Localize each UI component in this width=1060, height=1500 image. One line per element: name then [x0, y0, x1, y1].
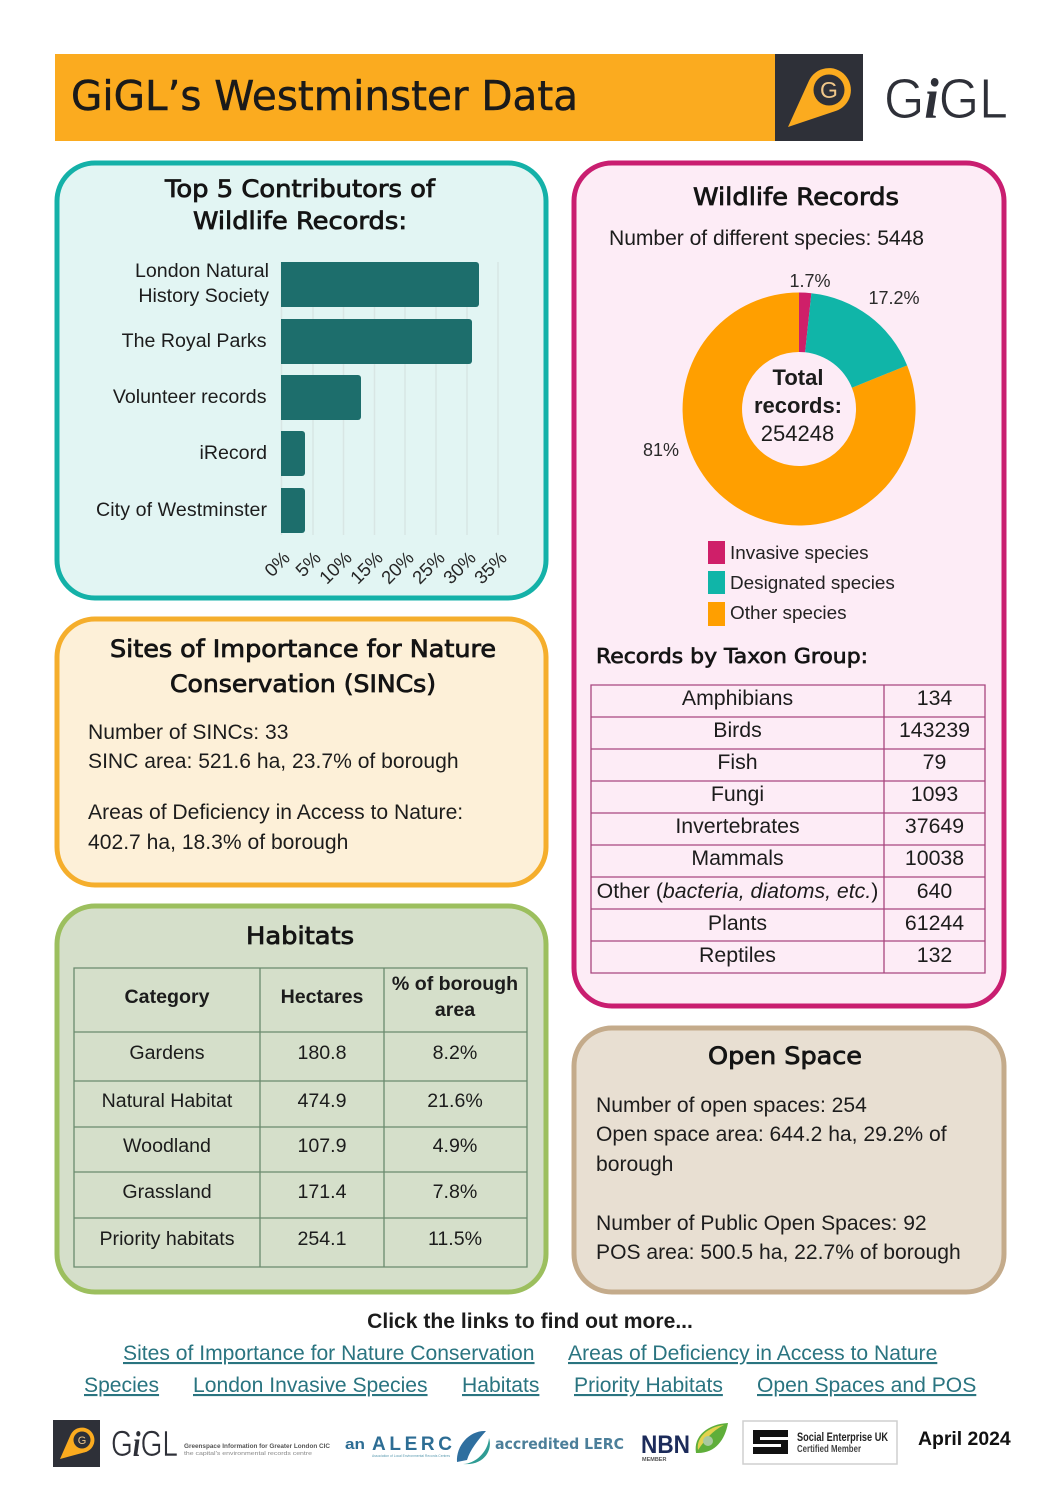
- table: taxon groups: 134: [917, 686, 952, 710]
- title: GiGL’s Westminster Data: [71, 72, 578, 120]
- donut chart: species share: Total: [773, 365, 823, 390]
- bar chart: contributors: 20%: [377, 547, 418, 588]
- table: taxon groups: 37649: [905, 814, 964, 838]
- table: taxon groups: Plants: [708, 911, 767, 935]
- table: taxon groups: Fish: [717, 750, 758, 774]
- text: public open spaces figures: Number of Public Open Spaces: 92: [596, 1212, 927, 1235]
- icon: GiGL map pin logo: G: [820, 77, 838, 103]
- links row two: Open Spaces and POS: [757, 1374, 976, 1397]
- bar chart: contributors: 0%: [260, 547, 294, 581]
- footer logo: ALERC accredited LERC: [345, 1431, 624, 1464]
- footer logo: Social Enterprise UK: [743, 1421, 897, 1464]
- bar chart: contributors: The Royal Parks: [122, 330, 267, 352]
- legend: [708, 541, 895, 626]
- table: habitats: % of borough: [392, 973, 518, 995]
- donut chart: species share: 81%: [643, 440, 679, 460]
- donut chart: species share: records:: [754, 393, 842, 418]
- footer logo: Social Enterprise UK: Social Enterprise UK: [797, 1430, 888, 1444]
- links row two: Habitats: [462, 1374, 539, 1397]
- text: open spaces figures: [596, 1094, 947, 1176]
- table: taxon groups: Fungi: [711, 782, 764, 806]
- text: SINC figures: SINC area: 521.6 ha, 23.7% of borough: [88, 750, 459, 773]
- links row one: Sites of Importance for Nature Conservation: [123, 1342, 535, 1365]
- text: open spaces figures: borough: [596, 1153, 673, 1176]
- table: habitats: 7.8%: [433, 1181, 477, 1203]
- text: areas of deficiency: [88, 801, 463, 854]
- table: habitats: [74, 968, 527, 1267]
- bar chart: contributors: 10%: [315, 547, 356, 588]
- header banner: [55, 54, 775, 141]
- icon: GiGL map pin logo: [775, 54, 863, 141]
- bar chart: contributors: History Society: [138, 285, 269, 307]
- text: SINC figures: Number of SINCs: 33: [88, 721, 288, 744]
- table: taxon groups: Mammals: [691, 846, 784, 870]
- links row two: Species: [84, 1374, 159, 1397]
- table: habitats: 21.6%: [427, 1090, 483, 1112]
- panel: top 5 contributors: [57, 163, 546, 598]
- bar chart: contributors: London Natural: [135, 260, 269, 282]
- bar chart: contributors: 30%: [439, 547, 480, 588]
- footer logo: ALERC accredited LERC: Association of Local Environmental Records Centres: [372, 1453, 450, 1458]
- table: habitats: 11.5%: [428, 1228, 482, 1250]
- footer logo: GiGL: the capital's environmental records centre: [184, 1451, 312, 1457]
- links row one: Areas of Deficiency in Access to Nature: [568, 1342, 937, 1365]
- footer logo: NBN member: MEMBER: [642, 1457, 666, 1463]
- table: habitats: 107.9: [297, 1135, 347, 1157]
- panel: open space: [574, 1028, 1004, 1292]
- text: areas of deficiency: 402.7 ha, 18.3% of borough: [88, 831, 348, 854]
- footer logo: Social Enterprise UK: Certified Member: [797, 1443, 861, 1455]
- table: habitats: Natural Habitat: [102, 1090, 233, 1112]
- footer logo: GiGL: [53, 1420, 331, 1467]
- links row one: [123, 1342, 937, 1365]
- legend: Designated species: [730, 573, 895, 594]
- table: taxon groups: 640: [917, 879, 952, 903]
- text: public open spaces figures: [596, 1212, 961, 1264]
- date: April 2024: [918, 1428, 1011, 1450]
- table: habitats: Category: [125, 986, 210, 1008]
- footer logo: ALERC accredited LERC: ALERC: [372, 1434, 452, 1455]
- donut chart: species share: 1.7%: [789, 271, 831, 291]
- donut chart: species share: [643, 271, 920, 526]
- links row two: [84, 1374, 976, 1397]
- heading: SINCs: [110, 635, 496, 698]
- heading: top 5 contributors: Top 5 Contributors of: [164, 175, 436, 203]
- heading: top 5 contributors: [164, 175, 436, 235]
- table: habitats: 254.1: [297, 1228, 347, 1250]
- panel: SINCs: [57, 619, 546, 885]
- bar chart: contributors: 5%: [291, 547, 325, 581]
- table: taxon groups: Other (bacteria, diatoms, etc.): [597, 879, 878, 903]
- bar chart: contributors: iRecord: [199, 442, 267, 464]
- table: taxon groups: 79: [923, 750, 946, 774]
- footer logo: NBN member: NBN: [641, 1431, 690, 1459]
- text: public open spaces figures: POS area: 500.5 ha, 22.7% of borough: [596, 1241, 961, 1264]
- panel: habitats: [57, 906, 546, 1292]
- table: taxon groups: 143239: [899, 718, 970, 742]
- heading: wildlife records: Wildlife Records: [693, 183, 899, 211]
- text: open spaces figures: Open space area: 644.2 ha, 29.2% of: [596, 1123, 947, 1146]
- bar chart: contributors: City of Westminster: [96, 499, 267, 521]
- heading: habitats: Habitats: [246, 922, 354, 950]
- bar chart: contributors: 35%: [470, 547, 511, 588]
- legend: Other species: [730, 603, 847, 624]
- footer logo: GiGL: Greenspace Information for Greater London CIC: [184, 1443, 331, 1450]
- table: taxon groups: [591, 685, 985, 973]
- table: taxon groups: Amphibians: [682, 686, 793, 710]
- text: SINC figures: [88, 721, 459, 773]
- table: habitats: 4.9%: [433, 1135, 477, 1157]
- table: habitats: 8.2%: [433, 1042, 477, 1064]
- table: habitats: 171.4: [297, 1181, 347, 1203]
- table: habitats: 180.8: [297, 1042, 347, 1064]
- heading: open space: Open Space: [708, 1042, 862, 1070]
- bar chart: contributors: 25%: [408, 547, 449, 588]
- table: habitats: Grassland: [122, 1181, 212, 1203]
- heading: records by taxon group: Records by Taxon Group:: [596, 644, 868, 668]
- panel: wildlife records: [574, 163, 1004, 1006]
- footer logo: GiGL: GiGL: [111, 1423, 178, 1464]
- footer logo: ALERC accredited LERC: accredited LERC: [495, 1435, 624, 1453]
- table: habitats: 474.9: [297, 1090, 347, 1112]
- bar chart: contributors: Volunteer records: [113, 386, 267, 408]
- text: areas of deficiency: Areas of Deficiency in Access to Nature:: [88, 801, 463, 824]
- text: number of species: Number of different species: 5448: [609, 227, 924, 250]
- heading: top 5 contributors: Wildlife Records:: [193, 207, 407, 235]
- donut chart: species share: 254248: [761, 421, 834, 446]
- table: taxon groups: Birds: [713, 718, 762, 742]
- table: taxon groups: 132: [917, 943, 952, 967]
- heading: SINCs: Conservation (SINCs): [170, 670, 436, 698]
- footer logo: NBN member: [641, 1423, 728, 1463]
- links row two: London Invasive Species: [193, 1374, 428, 1397]
- bar chart: contributors: 15%: [346, 547, 387, 588]
- table: taxon groups: 1093: [911, 782, 958, 806]
- GiGL wordmark: GiGL: [884, 67, 1008, 131]
- links heading: Click the links to find out more...: [367, 1310, 693, 1333]
- footer logo: GiGL: G: [78, 1435, 86, 1447]
- footer logo: ALERC accredited LERC: an: [345, 1436, 365, 1453]
- links row two: Priority Habitats: [574, 1374, 723, 1397]
- table: habitats: area: [435, 999, 476, 1021]
- table: habitats: Gardens: [129, 1042, 205, 1064]
- table: taxon groups: Reptiles: [699, 943, 776, 967]
- links section: [84, 1310, 976, 1397]
- table: habitats: Priority habitats: [99, 1228, 235, 1250]
- bar chart: contributors: [96, 260, 511, 588]
- legend: Invasive species: [730, 543, 869, 564]
- table: habitats: Hectares: [281, 986, 363, 1008]
- donut chart: species share: 17.2%: [868, 288, 920, 308]
- text: open spaces figures: Number of open spaces: 254: [596, 1094, 867, 1117]
- table: taxon groups: 10038: [905, 846, 964, 870]
- table: taxon groups: Invertebrates: [675, 814, 800, 838]
- heading: SINCs: Sites of Importance for Nature: [110, 635, 496, 663]
- table: habitats: Woodland: [123, 1135, 211, 1157]
- table: taxon groups: 61244: [905, 911, 964, 935]
